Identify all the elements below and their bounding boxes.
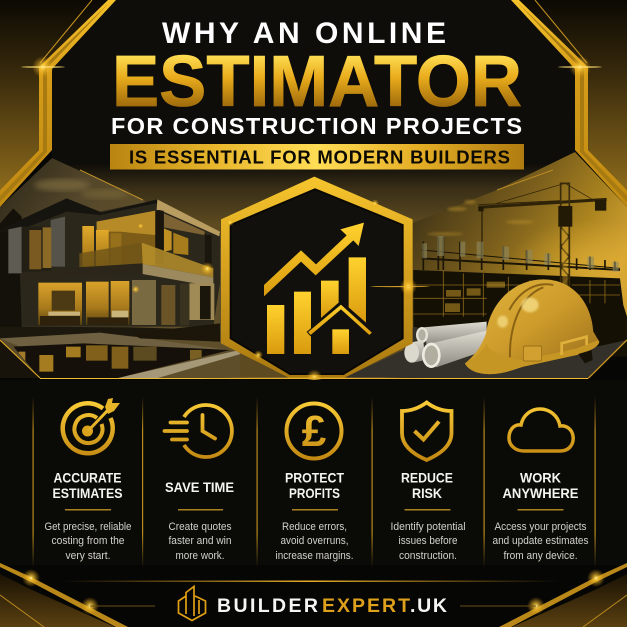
bar 2 xyxy=(294,292,311,354)
rule xyxy=(178,509,223,510)
footer ornament right xyxy=(460,563,627,627)
icon: building xyxy=(178,586,206,620)
sky: house side xyxy=(0,158,240,378)
description: from any device. xyxy=(504,550,578,562)
rule xyxy=(292,509,338,510)
heading: SAVE TIME xyxy=(165,479,234,495)
icon: pound coin: £ xyxy=(302,407,327,456)
panel: photo backdrop xyxy=(0,152,627,378)
icon: clock with speed lines xyxy=(164,405,232,457)
terrace xyxy=(0,327,220,342)
hard hat xyxy=(465,279,599,374)
crane xyxy=(478,183,607,287)
description: Access your projects xyxy=(494,521,587,533)
title line: why an online: WHY AN ONLINE xyxy=(162,17,446,50)
heading: ACCURATE xyxy=(54,470,122,486)
description xyxy=(168,521,232,562)
benefit: work anywhere xyxy=(492,409,589,562)
title line: for construction projects: FOR CONSTRUCTION PROJECTS xyxy=(111,113,522,139)
balcony glass xyxy=(79,243,143,267)
description: increase margins. xyxy=(276,550,354,562)
table surface xyxy=(343,327,627,378)
lights xyxy=(132,285,140,293)
description: costing from the xyxy=(52,535,124,547)
description xyxy=(44,521,132,562)
upper-left window xyxy=(29,230,41,269)
panel: header corner backgrounds xyxy=(0,0,627,240)
wordmark: EXPERT xyxy=(322,595,410,617)
bar 4 xyxy=(349,257,366,323)
furniture xyxy=(40,316,128,325)
left wall xyxy=(8,227,22,273)
description xyxy=(276,521,354,562)
description: faster and win xyxy=(168,535,232,547)
description: and update estimates xyxy=(492,535,589,547)
description: more work. xyxy=(176,550,224,562)
description: Get precise, reliable xyxy=(44,521,132,533)
upper glass room xyxy=(97,211,155,267)
description: Reduce errors, xyxy=(282,521,347,533)
house shell xyxy=(8,198,220,327)
balcony slab xyxy=(20,263,143,282)
rule xyxy=(65,509,111,510)
icon: pound coin xyxy=(286,404,342,458)
door xyxy=(332,329,349,354)
description: Create quotes xyxy=(168,521,232,533)
footer ornament left xyxy=(0,563,155,627)
benefit: save time xyxy=(164,405,234,562)
gold edge line xyxy=(588,340,627,378)
footer divider xyxy=(60,580,560,582)
description xyxy=(492,521,589,562)
wordmark: .UK xyxy=(410,595,447,617)
benefit: accurate estimates xyxy=(44,398,132,562)
description: very start. xyxy=(66,550,110,562)
sky: construction side xyxy=(400,152,627,378)
central hexagon badge xyxy=(204,177,430,385)
heading: WORK xyxy=(520,470,561,486)
lower floor glass xyxy=(38,283,82,325)
bar 1 xyxy=(267,305,284,354)
rule xyxy=(404,509,450,510)
subtitle banner: IS ESSENTIAL FOR MODERN BUILDERS xyxy=(129,146,510,168)
sparkles xyxy=(400,278,417,295)
icon: target with arrow xyxy=(63,398,120,453)
dark trees xyxy=(0,208,22,333)
bar 3 xyxy=(321,281,339,318)
description: construction. xyxy=(399,550,457,562)
panel: benefits xyxy=(0,380,627,568)
icon: shield with check xyxy=(402,402,452,460)
photo: construction site xyxy=(343,183,627,378)
crane counterweight and cab xyxy=(558,206,572,227)
wordmark: BUILDER xyxy=(217,595,318,617)
scaffold xyxy=(422,237,620,270)
icon: cloud xyxy=(509,409,573,451)
description: avoid overruns, xyxy=(280,535,348,547)
benefit: protect profits: PROFITS xyxy=(289,485,340,501)
description: Identify potential xyxy=(390,521,466,533)
logo: builder expert xyxy=(178,586,447,620)
roof chevron xyxy=(307,304,373,336)
description xyxy=(390,521,466,562)
building block xyxy=(413,270,627,357)
panel: gold frame left xyxy=(0,0,116,207)
blueprint rolls xyxy=(404,322,487,368)
pool xyxy=(13,343,230,378)
growth arrow xyxy=(264,223,364,296)
benefit: reduce risk xyxy=(390,402,466,562)
benefit: reduce risk: RISK xyxy=(412,485,442,501)
benefit: work anywhere: ANYWHERE xyxy=(502,485,578,501)
panel: gold frame right xyxy=(511,0,627,207)
title line: estimator: ESTIMATOR xyxy=(112,42,522,122)
photo: modern house xyxy=(0,198,241,378)
benefit: protect profits xyxy=(276,404,354,562)
icon: growth chart with house xyxy=(264,223,373,354)
title xyxy=(111,17,522,139)
description: issues before xyxy=(398,535,458,547)
heading: REDUCE xyxy=(401,470,453,486)
benefit: accurate estimates: ESTIMATES xyxy=(52,485,122,501)
wordmark xyxy=(217,595,447,617)
roof xyxy=(0,198,159,233)
heading: PROTECT xyxy=(285,470,344,486)
rule xyxy=(518,509,564,510)
bottom photo line xyxy=(0,340,588,379)
pool edge xyxy=(117,351,241,378)
